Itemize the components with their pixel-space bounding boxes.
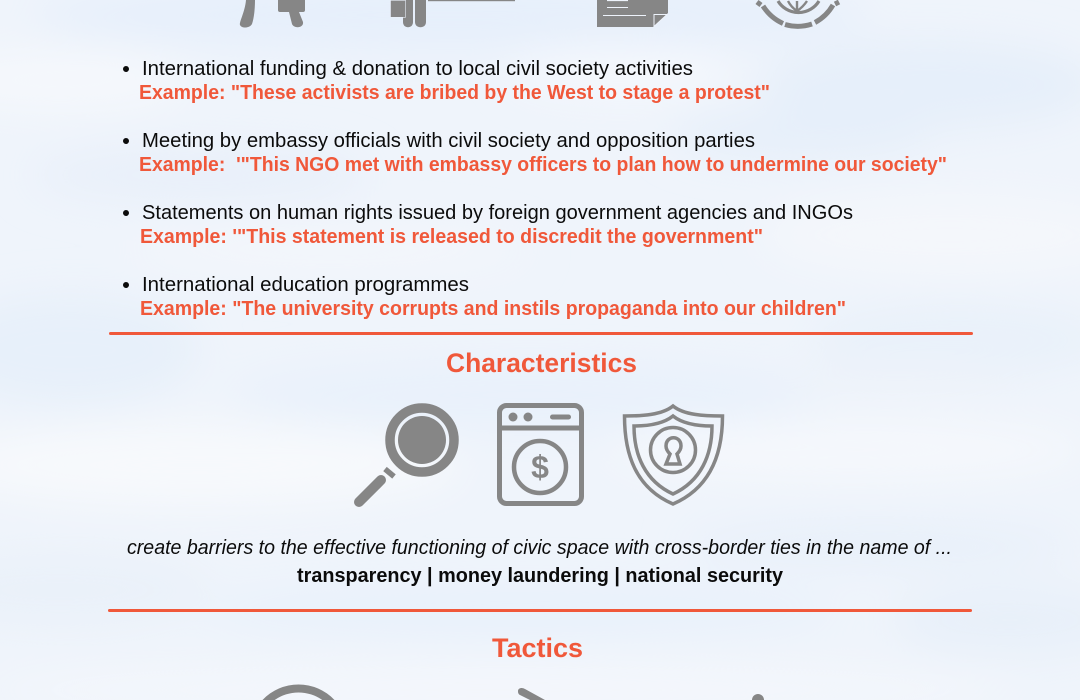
icon: tactic ring (cropped)	[262, 684, 334, 700]
list item 1	[123, 58, 770, 104]
list item 3: Example: '"This statement is released to discredit the government"	[140, 226, 763, 248]
icon: tactic pin (cropped)	[752, 694, 764, 700]
icon: magnifying glass	[359, 408, 454, 502]
list item 2	[123, 130, 947, 176]
icon: globe in dashed ring (cropped)	[757, 1, 839, 26]
icon: presenter with board (cropped)	[390, 0, 515, 27]
icon: two figures (cropped)	[240, 0, 305, 28]
list item 2: Example: '"This NGO met with embassy officers to plan how to undermine our society"	[139, 154, 947, 176]
list item 1: Example: "These activists are bribed by the West to stage a protest"	[139, 82, 770, 104]
heading: Characteristics: Characteristics	[446, 348, 637, 378]
characteristics keywords: transparency | money laundering | national security	[297, 564, 784, 587]
list item 4: International education programmes	[142, 274, 469, 296]
list item 4	[123, 274, 846, 320]
list item 3: Statements on human rights issued by foreign government agencies and INGOs	[142, 202, 853, 224]
icon: document with folded corner (cropped)	[597, 0, 668, 27]
icon: tactic megaphone (cropped)	[518, 688, 545, 700]
list item 2: Meeting by embassy officials with civil society and opposition parties	[142, 130, 755, 152]
list item 3	[123, 202, 853, 248]
icon: shield with keyhole	[624, 406, 722, 504]
heading: Tactics: Tactics	[492, 633, 583, 663]
icon: washing machine with dollar	[499, 406, 582, 504]
characteristics description: create barriers to the effective functioning of civic space with cross-border ties in the name of ...	[127, 537, 952, 559]
list item 1: International funding & donation to local civil society activities	[142, 58, 693, 80]
list item 4: Example: "The university corrupts and instils propaganda into our children"	[140, 298, 846, 320]
icon: washing machine with dollar: $	[531, 449, 549, 485]
